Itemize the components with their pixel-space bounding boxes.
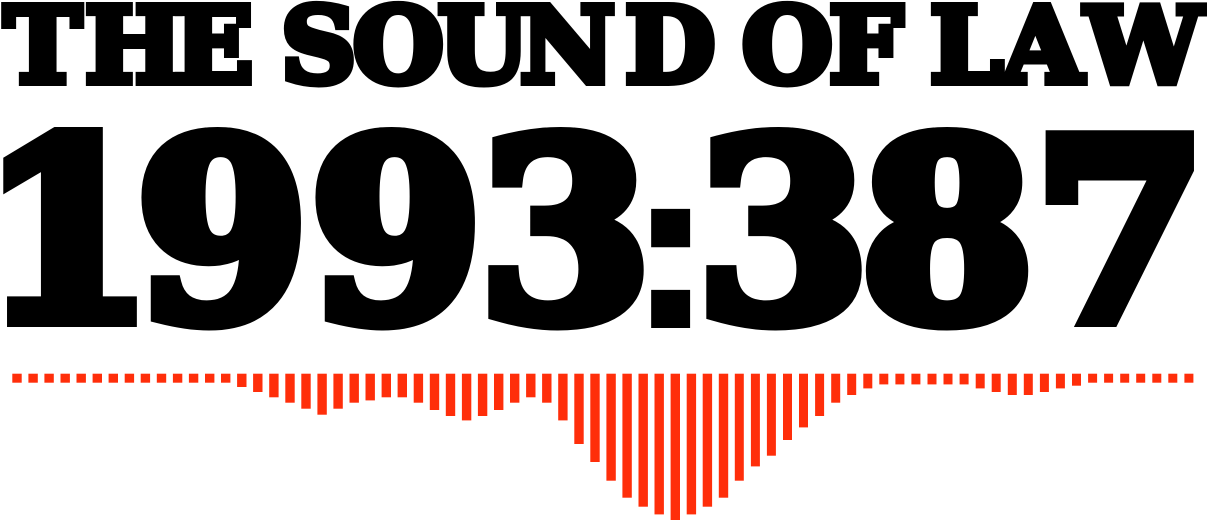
citation number: 387 <box>697 87 1207 378</box>
citation number: 1993 <box>0 87 652 378</box>
audio waveform bars <box>12 374 1193 520</box>
citation number: : <box>634 125 707 371</box>
